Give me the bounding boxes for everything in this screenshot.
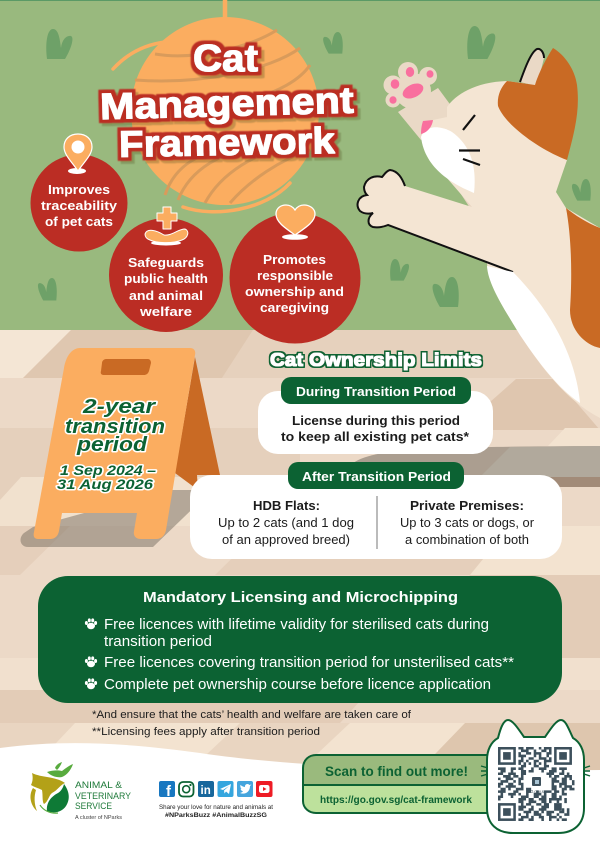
background: wooden floor <box>0 330 600 780</box>
board text: 2-year <box>82 396 156 418</box>
cat face lines <box>459 115 480 165</box>
logo: animal and veterinary service: SERVICE <box>75 801 112 812</box>
logo: animal and veterinary service: VETERINARY <box>75 791 132 802</box>
title: Management <box>99 80 354 127</box>
QR code <box>498 748 574 820</box>
sign board: transition period <box>21 348 220 547</box>
panel: during transition period: During Transition Period <box>296 384 456 399</box>
board text: 1 Sep 2024 – <box>60 462 156 478</box>
footnotes: **Licensing fees apply after transition period <box>92 726 320 738</box>
icon: linkedin: in <box>200 785 211 797</box>
footnotes: *And ensure that the cats’ health and welfare are taken care of <box>92 709 412 721</box>
social media caption: #NParksBuzz #AnimalBuzzSG <box>165 812 267 819</box>
icon: heart <box>276 205 315 240</box>
text: responsible ownership: ownership and <box>245 285 344 299</box>
text: responsible ownership: Promotes <box>263 253 326 267</box>
footer white wave <box>0 743 600 849</box>
bullet list: Free licences covering transition period for unsterilised cats** <box>104 654 514 671</box>
social media caption <box>159 804 273 819</box>
panel: after transition period <box>190 462 562 559</box>
cat raised leg and paw <box>384 62 452 140</box>
cat paw outline <box>358 170 513 272</box>
logo: animal and veterinary service: A cluster of NParks <box>75 815 122 821</box>
bullet list: Complete pet ownership course before licence application <box>104 676 491 693</box>
scan banner <box>303 755 495 813</box>
board text: transition <box>65 416 165 438</box>
title: Framework <box>119 120 336 165</box>
private premises column: a combination of both <box>405 533 529 547</box>
board text: 31 Aug 2026 <box>57 476 153 492</box>
title: Cat <box>193 38 258 80</box>
text: traceability: of pet cats <box>45 215 113 229</box>
scan banner: Scan to find out more! <box>325 763 468 779</box>
board back <box>175 357 220 490</box>
cat chin shade <box>455 185 482 211</box>
logo: animal and veterinary service: ANIMAL & <box>75 780 123 791</box>
decorative grass tufts <box>38 26 591 307</box>
panel: during transition period <box>258 377 493 454</box>
HDB flats column <box>218 499 354 547</box>
board text <box>57 396 165 492</box>
cat belly <box>487 266 580 403</box>
cat muzzle <box>421 127 475 193</box>
cat shaped QR frame <box>487 720 584 833</box>
cat illustration <box>358 48 600 418</box>
HDB flats column: HDB Flats: <box>253 499 320 513</box>
panel: mandatory licensing: Mandatory Licensing and Microchipping <box>143 589 458 606</box>
icon: location pin <box>64 134 92 174</box>
board front <box>34 348 195 539</box>
cat ear <box>520 49 544 86</box>
cat tongue <box>421 120 433 134</box>
benefit circle: traceability <box>30 134 128 252</box>
footnotes <box>92 709 412 738</box>
icon: facebook: f <box>166 783 172 800</box>
icon: instagram <box>179 782 194 796</box>
text: responsible ownership: responsible <box>257 269 333 283</box>
text: traceability: traceability <box>41 199 117 213</box>
panel: during transition period: to keep all existing pet cats* <box>281 430 469 444</box>
social media caption: Share your love for nature and animals at <box>159 804 273 811</box>
board handle <box>101 359 151 375</box>
benefit circle: public health <box>109 207 223 332</box>
title <box>99 38 354 165</box>
QR code cat <box>481 720 590 833</box>
social media icons <box>159 781 272 800</box>
text: traceability <box>41 183 117 229</box>
cat head patch <box>498 48 578 160</box>
whiskers <box>481 766 590 776</box>
panel: mandatory licensing <box>38 576 562 703</box>
text: public health: and animal <box>129 289 203 303</box>
panel: after transition period: After Transition Period <box>302 469 451 484</box>
bullet list: Free licences with lifetime validity for sterilised cats during <box>104 616 489 633</box>
background: grass wall <box>0 0 600 332</box>
logo mark <box>30 762 73 813</box>
icon: twitter <box>237 781 253 797</box>
board shadow <box>21 490 212 547</box>
text: public health: public health <box>124 272 208 286</box>
logo: animal and veterinary service <box>30 762 132 821</box>
icon: youtube <box>256 781 272 797</box>
bullet list <box>85 616 514 693</box>
private premises column: Private Premises: <box>410 499 524 513</box>
scan banner: https://go.gov.sg/cat-framework <box>320 794 472 806</box>
text: responsible ownership: caregiving <box>260 301 329 315</box>
text: public health <box>124 256 208 319</box>
private premises column: Up to 3 cats or dogs, or <box>400 516 534 530</box>
cat body <box>358 81 600 418</box>
heading: cat ownership limits: Cat Ownership Limits <box>270 349 482 370</box>
board text: period <box>76 434 148 456</box>
text: responsible ownership <box>245 253 344 315</box>
icon: hand with cross <box>145 207 188 246</box>
bullet list: transition period <box>104 633 212 650</box>
yarn ball <box>113 0 319 212</box>
panel: during transition period: License during this period <box>292 414 460 428</box>
text: public health: Safeguards <box>128 256 204 270</box>
benefit circle: responsible ownership <box>230 205 360 344</box>
text: public health: welfare <box>139 305 192 319</box>
QR centre logo: GO.gov.sg <box>527 789 546 794</box>
private premises column <box>400 499 534 547</box>
cat shadow on floor <box>335 446 600 487</box>
cat back patch <box>566 208 600 348</box>
HDB flats column: of an approved breed) <box>222 533 350 547</box>
HDB flats column: Up to 2 cats (and 1 dog <box>218 516 354 530</box>
text: traceability: Improves <box>48 183 110 197</box>
icon: telegram <box>218 781 234 797</box>
